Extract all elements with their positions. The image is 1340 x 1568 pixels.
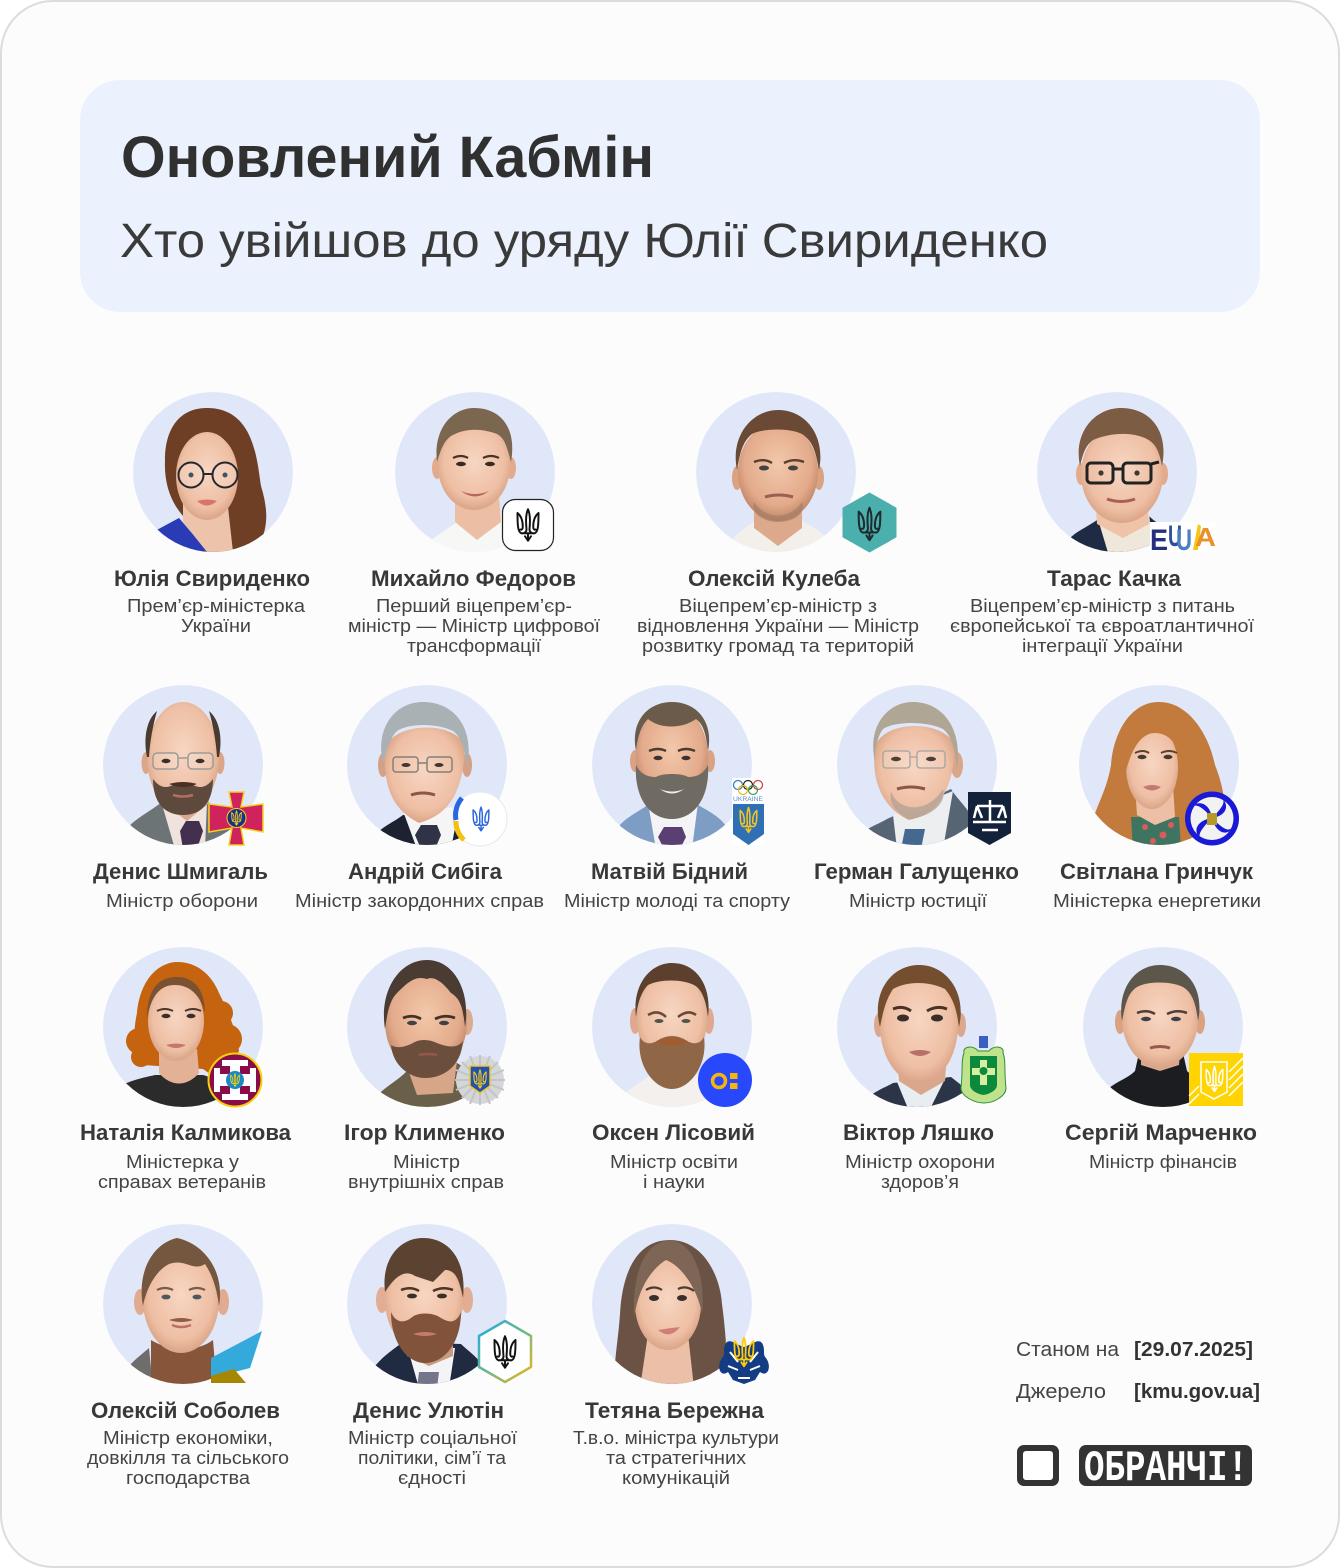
- role: розвитку громад та територій: [642, 636, 914, 656]
- portrait: [1083, 947, 1243, 1111]
- person: Олексій Кулеба: [637, 392, 919, 656]
- name: Олексій Кулеба: [688, 566, 861, 591]
- role: Міністр фінансів: [1089, 1152, 1237, 1172]
- portrait: [592, 947, 752, 1111]
- portrait: [347, 947, 507, 1111]
- logo: Обранці: [1017, 1444, 1252, 1494]
- person: Наталія Калмикова: [80, 947, 292, 1192]
- role: Віцепрем’єр-міністр з питань: [970, 596, 1235, 616]
- name: Денис Улютін: [353, 1398, 504, 1423]
- role: відновлення України — Міністр: [637, 616, 919, 636]
- name: Юлія Свириденко: [114, 566, 310, 591]
- icon: olympic committee badge: UKRAINE: [733, 797, 763, 803]
- portrait: [592, 1224, 752, 1388]
- role: Прем’єр-міністерка: [127, 596, 306, 616]
- role: єдності: [398, 1468, 466, 1488]
- text block: date and source: [1016, 1339, 1260, 1403]
- role: Міністерка у: [126, 1152, 239, 1172]
- role: [348, 596, 600, 656]
- person: Матвій Бідний: [564, 685, 790, 911]
- portrait: [103, 685, 263, 849]
- role: [127, 596, 306, 636]
- role: Міністр освіти: [610, 1152, 738, 1172]
- role: Міністр юстиції: [849, 891, 987, 911]
- person: Сергій Марченко: [1065, 947, 1257, 1172]
- role: міністр — Міністр цифрової: [348, 616, 600, 636]
- icon: social policy hexagon badge: [479, 1321, 531, 1382]
- role: здоров’я: [881, 1172, 959, 1192]
- portrait: [837, 947, 997, 1111]
- person: Денис Шмигаль: [93, 685, 268, 911]
- person: Віктор Ляшко: [837, 947, 1006, 1192]
- name: Світлана Гринчук: [1060, 859, 1254, 884]
- role: політики, сім’ї та: [358, 1448, 507, 1468]
- title: Оновлений Кабмін: [121, 125, 654, 190]
- text block: date and source: [kmu.gov.ua]: [1134, 1381, 1260, 1403]
- logo: Обранці: ОБРАНЧІ!: [1084, 1444, 1248, 1494]
- role: Віцепрем’єр-міністр з: [679, 596, 877, 616]
- role: комунікацій: [622, 1468, 730, 1488]
- portrait: [837, 685, 997, 849]
- icon: trident badge: [502, 500, 554, 550]
- person: Оксен Лісовий: [592, 947, 755, 1192]
- name: Михайло Федоров: [371, 566, 576, 591]
- role: Міністр оборони: [106, 891, 258, 911]
- person: Андрій Сибіга: [295, 685, 544, 911]
- role: Міністерка енергетики: [1053, 891, 1261, 911]
- role: [573, 1428, 779, 1488]
- name: Наталія Калмикова: [80, 1120, 292, 1145]
- icon: EUUA logo badge: [1150, 520, 1216, 557]
- role: європейської та євроатлантичної: [950, 616, 1254, 636]
- icon: olympic committee badge: [732, 778, 764, 845]
- role: Міністр охорони: [845, 1152, 995, 1172]
- role: [98, 1152, 266, 1192]
- icon: police star badge: [455, 1055, 505, 1105]
- role: [348, 1428, 517, 1488]
- person: Денис Улютін: [347, 1224, 531, 1488]
- role: Міністр: [393, 1152, 460, 1172]
- person: Ігор Клименко: [344, 947, 507, 1192]
- icon: EUUA logo badge: A: [1195, 522, 1216, 552]
- role: [637, 596, 919, 656]
- portrait: [347, 1224, 507, 1388]
- role: Перший віцепрем’єр-: [376, 596, 572, 616]
- icon: foreign ministry badge: [453, 792, 507, 846]
- person: Тарас Качка: [950, 392, 1254, 656]
- name: Тарас Качка: [1047, 566, 1182, 591]
- role: України: [181, 616, 251, 636]
- icon: education ministry badge: [698, 1053, 752, 1107]
- name: Олексій Соболев: [91, 1398, 280, 1423]
- role: [610, 1152, 738, 1192]
- role: Міністр молоді та спорту: [564, 891, 790, 911]
- icon: EUUA logo badge: E: [1150, 524, 1168, 557]
- portrait: [592, 685, 752, 849]
- role: трансформації: [407, 636, 541, 656]
- portrait: [395, 392, 555, 556]
- text block: date and source: Джерело: [1016, 1381, 1106, 1403]
- icon: economy ministry badge: [211, 1331, 262, 1383]
- icon: justice ministry shield badge: [968, 792, 1011, 845]
- role: [950, 596, 1254, 656]
- person: Юлія Свириденко: [114, 392, 310, 636]
- icon: health ministry badge: [961, 1036, 1006, 1103]
- person: Олексій Соболев: [87, 1224, 289, 1488]
- person: Михайло Федоров: [348, 392, 600, 656]
- portrait: [103, 1224, 263, 1388]
- name: Денис Шмигаль: [93, 859, 268, 884]
- icon: energy ministry seal badge: [1185, 792, 1239, 846]
- name: Ігор Клименко: [344, 1120, 505, 1145]
- role: Міністр соціальної: [348, 1428, 517, 1448]
- role: і науки: [643, 1172, 705, 1192]
- icon: EUUA logo badge: U: [1176, 524, 1192, 557]
- name: Тетяна Бережна: [585, 1398, 765, 1423]
- portrait: [1079, 685, 1239, 849]
- name: Сергій Марченко: [1065, 1120, 1257, 1145]
- text block: date and source: Станом на: [1016, 1339, 1120, 1361]
- role: [845, 1152, 995, 1192]
- icon: finance ministry badge: [1189, 1053, 1243, 1106]
- role: господарства: [126, 1468, 251, 1488]
- portrait: [347, 685, 507, 849]
- name: Герман Галущенко: [814, 859, 1019, 884]
- person: Світлана Гринчук: [1053, 685, 1261, 911]
- portrait: [696, 392, 856, 556]
- icon: teal hexagon badge: [843, 493, 896, 552]
- icon: defence ministry cross badge: [209, 792, 263, 845]
- role: інтеграції України: [1022, 636, 1183, 656]
- role: внутрішніх справ: [348, 1172, 504, 1192]
- portrait: [1037, 392, 1197, 556]
- text block: date and source: [29.07.2025]: [1134, 1339, 1253, 1361]
- role: Міністр закордонних справ: [295, 891, 544, 911]
- icon: culture ministry ornament badge: [719, 1338, 769, 1384]
- role: та стратегічних: [606, 1448, 746, 1468]
- subtitle: Хто увійшов до уряду Юлії Свириденко: [120, 215, 1048, 268]
- portrait: [103, 947, 263, 1117]
- name: Оксен Лісовий: [592, 1120, 755, 1145]
- role: [348, 1152, 504, 1192]
- name: Андрій Сибіга: [348, 859, 503, 884]
- role: [87, 1428, 289, 1488]
- name: Віктор Ляшко: [843, 1120, 994, 1145]
- name: Матвій Бідний: [591, 859, 748, 884]
- icon: veterans ministry badge: [208, 1054, 262, 1106]
- person: Тетяна Бережна: [573, 1224, 779, 1488]
- portrait: [133, 392, 293, 552]
- role: справах ветеранів: [98, 1172, 266, 1192]
- role: Міністр економіки,: [103, 1428, 273, 1448]
- icon: EUUA logo badge: U: [1168, 520, 1182, 553]
- role: Т.в.о. міністра культури: [573, 1428, 779, 1448]
- panel: header: [80, 80, 1260, 312]
- role: довкілля та сільського: [87, 1448, 289, 1468]
- person: Герман Галущенко: [814, 685, 1019, 911]
